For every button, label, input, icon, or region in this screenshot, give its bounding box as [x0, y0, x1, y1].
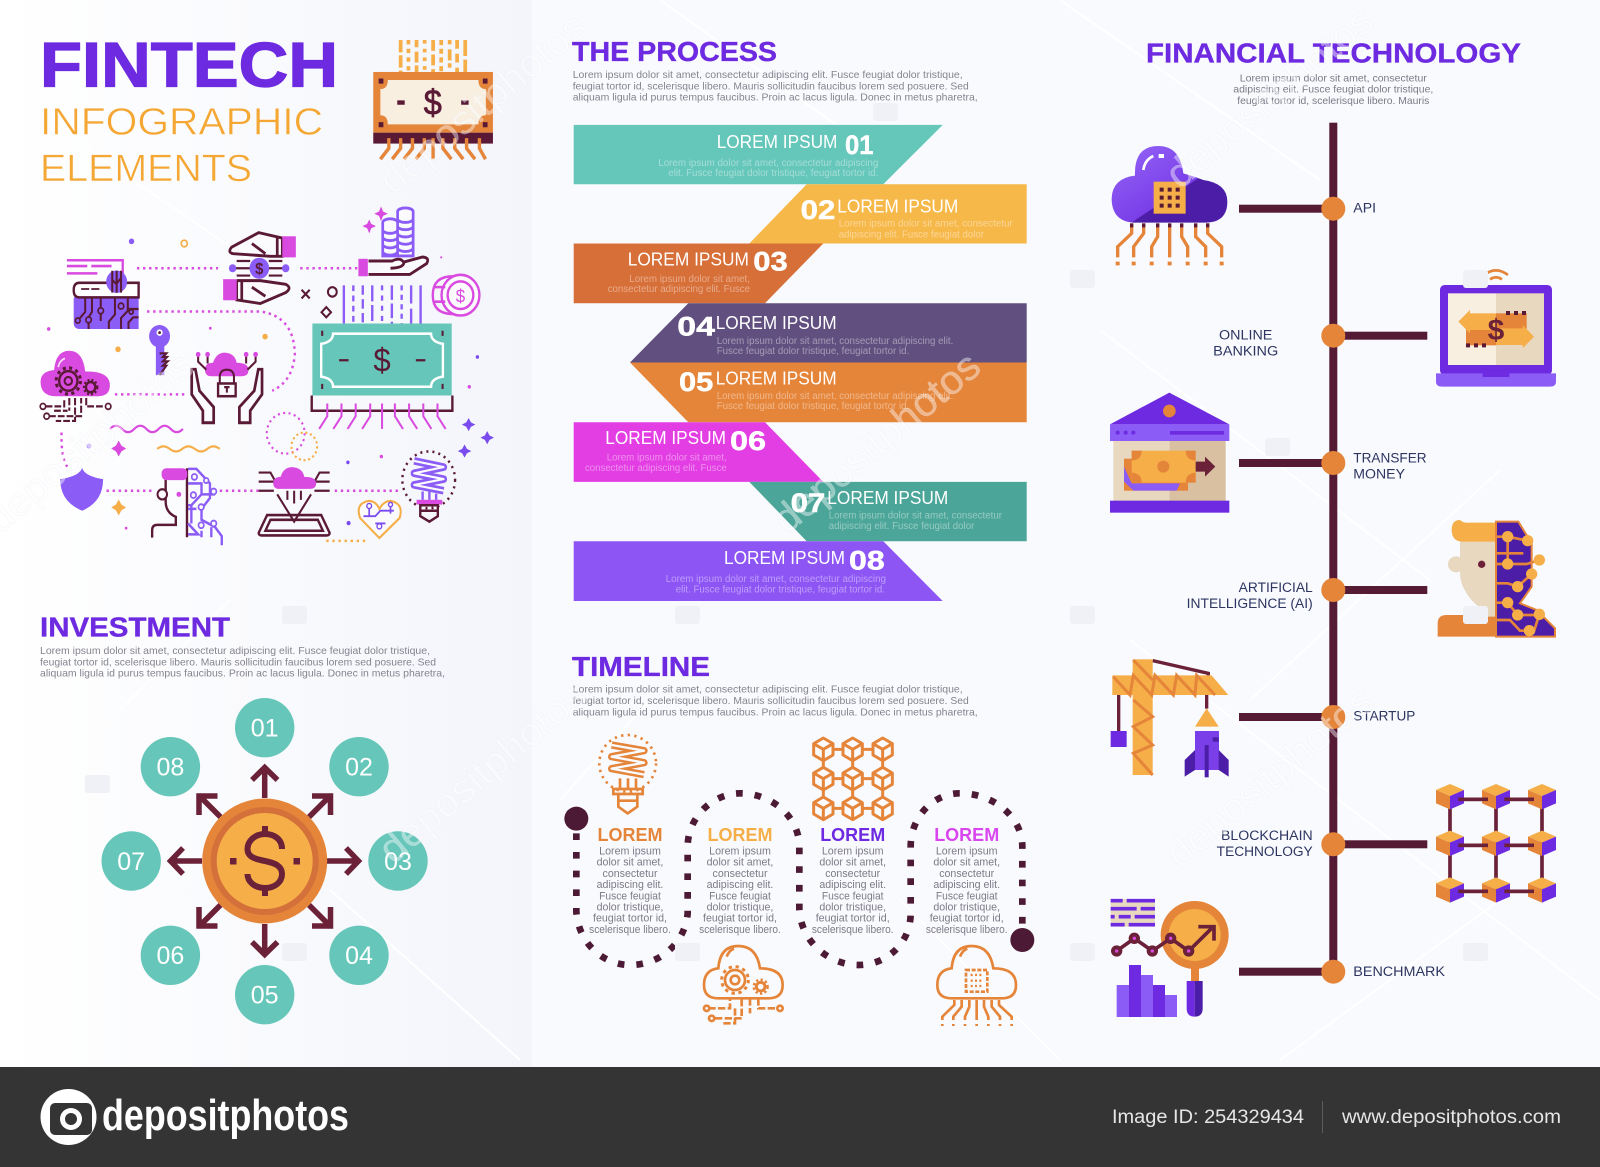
- footer url: www.depositphotos.com: [1341, 1107, 1561, 1128]
- icon: orange blockchain: [814, 738, 892, 820]
- icon: cloud lock held by hands: [192, 352, 262, 423]
- label: online banking: ONLINE: [1219, 327, 1272, 342]
- label: blockchain technology: TECHNOLOGY: [1217, 844, 1313, 859]
- ribbon 01: [574, 125, 943, 184]
- label: benchmark: BENCHMARK: [1353, 964, 1445, 979]
- timeline step 4 text: adipiscing elit.: [933, 879, 1000, 891]
- text: process description: feugiat tortor id, scelerisque libero. Mauris sollicitudin faucibus lorem sed posuere. Sed: [573, 80, 969, 92]
- icon: key: [149, 325, 170, 375]
- text: financial technology description: [1233, 73, 1433, 107]
- text: financial technology description: adipiscing elit. Fusce feugiat dolor tristique,: [1233, 84, 1433, 96]
- title: FINTECH infographic elements: INFOGRAPHIC: [40, 102, 323, 144]
- timeline step 2 text: LOREM: [708, 825, 772, 845]
- ribbon 03: [574, 244, 823, 303]
- icon: orange cloud chip: [937, 946, 1016, 1026]
- ribbon 06: 06: [730, 426, 766, 456]
- timeline step 1 text: scelerisque libero.: [589, 924, 671, 936]
- ribbon 01: 01: [845, 130, 874, 160]
- label: artificial intelligence: ARTIFICIAL: [1239, 580, 1313, 595]
- ribbon 07: 07: [791, 488, 825, 518]
- watermark: camera marks: [85, 103, 1488, 961]
- timeline step 4 text: dolor sit amet,: [933, 857, 1000, 869]
- text: process description: [573, 69, 978, 103]
- ribbon 02: [749, 184, 1027, 244]
- numbered circles 01 to 08: 01: [251, 714, 279, 742]
- timeline step 3 text: LOREM: [820, 825, 885, 845]
- watermark: depositphotos text: depositphotos: [1158, 0, 1382, 197]
- timeline step 1 text: Fusce feugiat: [599, 890, 661, 902]
- numbered circles 01 to 08: 03: [384, 848, 412, 876]
- icon: laptop banking: $: [1488, 314, 1505, 347]
- icon: hand holding coins: [358, 206, 428, 276]
- timeline step 1 text: dolor tristique,: [597, 902, 663, 914]
- icon: green banknote chip: [312, 324, 452, 429]
- icon: AI head: [152, 468, 222, 545]
- heading: investment: INVESTMENT: [40, 612, 230, 642]
- ribbon 06: consectetur adipiscing elit. Fusce: [585, 463, 727, 474]
- ribbon 07: [749, 482, 1027, 541]
- icon: pink coin: [433, 275, 479, 316]
- icon: crane with rocket: [1111, 659, 1229, 777]
- vertical tree timeline: [1187, 123, 1445, 984]
- ribbon 01: LOREM IPSUM: [717, 132, 837, 152]
- ribbon 03: LOREM IPSUM: [628, 250, 749, 270]
- label: blockchain technology: [1217, 828, 1313, 859]
- timeline step 4 text: [926, 825, 1008, 936]
- ribbon 05: [630, 362, 1027, 422]
- arrows: [170, 768, 358, 954]
- icon: blockchain cubes: [1436, 784, 1556, 903]
- icon: orange bulb: [599, 735, 656, 813]
- timeline step 1 text: [589, 825, 671, 936]
- label: blockchain technology: BLOCKCHAIN: [1221, 828, 1313, 843]
- timeline graphics: [564, 735, 1034, 1026]
- icon: digital wallet card: [67, 260, 139, 329]
- numbered circles 01 to 08: 04: [345, 942, 373, 970]
- process ribbons: [574, 125, 1027, 601]
- label: startup: STARTUP: [1353, 708, 1415, 723]
- icon: API cloud: [1112, 146, 1227, 265]
- ribbon 08: [574, 541, 943, 601]
- icon: chip banknote: [373, 40, 493, 159]
- timeline step 2 text: scelerisque libero.: [699, 924, 781, 936]
- watermark: depositphotos text: depositphotos: [371, 5, 595, 203]
- icon: circuit heart: [359, 501, 401, 538]
- ribbon 05: Fusce feugiat dolor tristique, feugiat tortor id.: [717, 401, 909, 412]
- timeline step 4 text: Fusce feugiat: [936, 890, 998, 902]
- icon: orange cloud gears: [704, 946, 783, 1023]
- ribbon 03: consectetur adipiscing elit. Fusce: [608, 284, 750, 295]
- timeline step 1 text: consectetur: [602, 868, 658, 880]
- timeline step 3 text: [812, 825, 894, 936]
- watermark: depositphotos text: depositphotos: [1158, 679, 1382, 877]
- timeline step 3 text: adipiscing elit.: [819, 879, 886, 891]
- icon: green banknote chip: $: [373, 341, 391, 379]
- timeline step 2 text: consectetur: [712, 868, 768, 880]
- label: API: API: [1353, 201, 1376, 216]
- timeline step 1 text: feugiat tortor id,: [593, 913, 667, 925]
- timeline step 4 text: Lorem ipsum: [936, 845, 998, 857]
- timeline step 3 text: Lorem ipsum: [822, 845, 884, 857]
- icon: AI head: [1438, 520, 1555, 637]
- radial chart: investment: [102, 698, 428, 1024]
- connectors: pink dotted lines: [61, 268, 399, 541]
- ribbon 04: 04: [677, 312, 715, 342]
- timeline step 2 text: feugiat tortor id,: [703, 913, 777, 925]
- nodes: [1321, 197, 1345, 984]
- ribbon 06: Lorem ipsum dolor sit amet,: [607, 452, 727, 464]
- numbered circles 01 to 08: 07: [117, 848, 145, 876]
- numbered circles 01 to 08: 02: [345, 754, 373, 782]
- label: artificial intelligence: [1187, 580, 1313, 611]
- label: transfer money: MONEY: [1353, 466, 1405, 481]
- timeline step 2 text: dolor tristique,: [707, 902, 773, 914]
- timeline step 3 text: dolor tristique,: [819, 902, 886, 914]
- timeline step 3 text: feugiat tortor id,: [816, 913, 890, 925]
- numbered circles 01 to 08: 08: [156, 754, 184, 782]
- footer logo: [40, 1089, 349, 1145]
- text: investment description: feugiat tortor id, scelerisque libero. Mauris sollicitudin faucibus lorem sed posuere. Sed: [40, 656, 436, 668]
- timeline step 2 text: Fusce feugiat: [709, 890, 771, 902]
- ribbon 04: [630, 303, 1027, 362]
- timeline step 4 text: dolor tristique,: [933, 902, 1000, 914]
- heading: timeline: TIMELINE: [572, 651, 710, 682]
- watermark: depositphotos text: depositphotos: [765, 344, 989, 542]
- label: online banking: BANKING: [1213, 343, 1278, 358]
- decoration: waves, sparkles and dots: [47, 238, 494, 530]
- text: financial technology description: feugiat tortor id, scelerisque libero. Mauris: [1237, 95, 1429, 107]
- icon: hands exchanging money: $: [255, 261, 264, 278]
- ribbon 07: adipiscing elit. Fusce feugiat dolor: [829, 521, 975, 532]
- timeline step 3 text: scelerisque libero.: [812, 924, 894, 936]
- ribbon 02: adipiscing elit. Fusce feugiat dolor: [839, 229, 985, 240]
- text: timeline description: [573, 684, 978, 718]
- icon: chip banknote: $: [424, 84, 442, 123]
- label: artificial intelligence: INTELLIGENCE (AI): [1187, 596, 1313, 611]
- footer bar: [0, 1067, 1600, 1167]
- ribbon 04: Fusce feugiat dolor tristique, feugiat tortor id.: [717, 346, 909, 357]
- timeline step 2 text: [699, 825, 781, 936]
- ribbon 01: elit. Fusce feugiat dolor tristique, feugiat tortor id.: [668, 168, 878, 179]
- text: process description: Lorem ipsum dolor sit amet, consectetur adipiscing elit. Fusce feugiat dolor tristique,: [573, 69, 963, 81]
- text: financial technology description: Lorem ipsum dolor sit amet, consectetur: [1240, 73, 1427, 85]
- ribbon 06: [574, 422, 823, 482]
- dashed winding path: [576, 793, 1022, 965]
- ribbon 02: Lorem ipsum dolor sit amet, consectetur: [839, 219, 1013, 230]
- timeline step 3 text: dolor sit amet,: [819, 857, 886, 869]
- timeline start dot: [564, 807, 588, 831]
- ribbon 05: 05: [679, 367, 713, 397]
- icon: light bulb: [402, 451, 455, 522]
- ribbon 03: Lorem ipsum dolor sit amet,: [629, 274, 750, 285]
- icon: bank transfer: [1110, 393, 1229, 513]
- illustration cluster: fintech line icons: [40, 40, 494, 545]
- watermark: depositphotos text: depositphotos: [371, 674, 595, 872]
- ribbon 04: Lorem ipsum dolor sit amet, consectetur adipiscing elit.: [717, 336, 953, 347]
- ribbon 04: LOREM IPSUM: [716, 313, 837, 333]
- heading: the process: THE PROCESS: [572, 36, 777, 67]
- timeline step 1 text: dolor sit amet,: [597, 857, 663, 869]
- text: timeline description: feugiat tortor id, scelerisque libero. Mauris sollicitudin faucibus lorem sed posuere. Sed: [573, 695, 969, 707]
- numbered circles 01 to 08: [102, 698, 428, 1024]
- text: investment description: aliquam ligula id purus tempus faucibus. Proin ac lacus ligula. Donec in metus pharetra,: [40, 667, 445, 679]
- icon: data rain and shapes: [302, 285, 421, 324]
- timeline step 2 text: adipiscing elit.: [707, 879, 773, 891]
- ribbon 08: 08: [849, 546, 885, 576]
- ribbon 05: LOREM IPSUM: [716, 368, 837, 388]
- icon: cloud with gears: [40, 351, 111, 421]
- ribbon 08: elit. Fusce feugiat dolor tristique, feugiat tortor id.: [676, 584, 885, 596]
- numbered circles 01 to 08: 06: [156, 942, 184, 970]
- text: timeline description: aliquam ligula id purus tempus faucibus. Proin ac lacus ligula. Donec in metus pharetra,: [573, 706, 978, 718]
- timeline step 3 text: consectetur: [825, 868, 881, 880]
- ribbon 02: LOREM IPSUM: [837, 196, 958, 216]
- timeline step 4 text: scelerisque libero.: [926, 924, 1008, 936]
- timeline step 4 text: LOREM: [934, 825, 999, 845]
- icon: hands exchanging money: [223, 233, 296, 304]
- ribbon 07: Lorem ipsum dolor sit amet, consectetur: [829, 511, 1003, 522]
- timeline step 3 text: Fusce feugiat: [822, 890, 884, 902]
- timeline step 4 text: feugiat tortor id,: [930, 913, 1004, 925]
- ribbon 02: 02: [801, 195, 835, 225]
- text: investment description: [40, 645, 445, 679]
- icons lower right column: [1111, 520, 1556, 1017]
- icon: pink coin: $: [456, 286, 465, 307]
- timeline step 1 text: LOREM: [598, 825, 662, 845]
- label: transfer money: [1353, 450, 1427, 481]
- icon: benchmark analytics: [1111, 899, 1229, 1017]
- timeline step 2 text: dolor sit amet,: [707, 857, 773, 869]
- ribbon 08: LOREM IPSUM: [724, 548, 845, 568]
- icons upper right column: [1110, 146, 1556, 513]
- timeline step 4 text: consectetur: [939, 868, 995, 880]
- text: process description: aliquam ligula id purus tempus faucibus. Proin ac lacus ligula. Donec in metus pharetra,: [573, 91, 978, 103]
- icon: shield: [60, 468, 103, 511]
- ribbon 05: Lorem ipsum dolor sit amet, consectetur adipiscing elit.: [717, 391, 953, 402]
- icon: laptop banking: [1436, 270, 1556, 387]
- timeline step 2 text: Lorem ipsum: [709, 845, 771, 857]
- timeline step 1 text: Lorem ipsum: [599, 845, 661, 857]
- text: investment description: Lorem ipsum dolor sit amet, consectetur adipiscing elit. Fusce feugiat dolor tristique,: [40, 645, 430, 657]
- label: transfer money: TRANSFER: [1353, 450, 1427, 465]
- ribbon 01: Lorem ipsum dolor sit amet, consectetur adipiscing: [658, 158, 878, 169]
- center coin: [202, 798, 327, 924]
- label: online banking: [1213, 327, 1278, 358]
- timeline step 1 text: adipiscing elit.: [597, 879, 663, 891]
- heading: financial technology: FINANCIAL TECHNOLOGY: [1146, 38, 1521, 69]
- footer logo: depositphotos: [102, 1091, 349, 1140]
- ribbon 07: LOREM IPSUM: [827, 488, 948, 508]
- trunk and branches: [1239, 123, 1427, 976]
- title: FINTECH infographic elements: FINTECH: [40, 30, 338, 100]
- ribbon 06: LOREM IPSUM: [605, 428, 726, 448]
- title: FINTECH infographic elements: ELEMENTS: [40, 148, 252, 190]
- watermark: depositphotos text: [0, 0, 1382, 877]
- ribbon 03: 03: [753, 247, 788, 277]
- timeline end dot: [1010, 928, 1034, 952]
- title: FINTECH infographic elements: [40, 30, 338, 190]
- text: timeline description: Lorem ipsum dolor sit amet, consectetur adipiscing elit. Fusce feugiat dolor tristique,: [573, 684, 963, 696]
- footer image id: Image ID: 254329434: [1112, 1107, 1304, 1128]
- ribbon 08: Lorem ipsum dolor sit amet, consectetur adipiscing: [666, 574, 886, 585]
- numbered circles 01 to 08: 05: [251, 982, 279, 1010]
- icon: cloud hologram on tablet: [259, 467, 330, 535]
